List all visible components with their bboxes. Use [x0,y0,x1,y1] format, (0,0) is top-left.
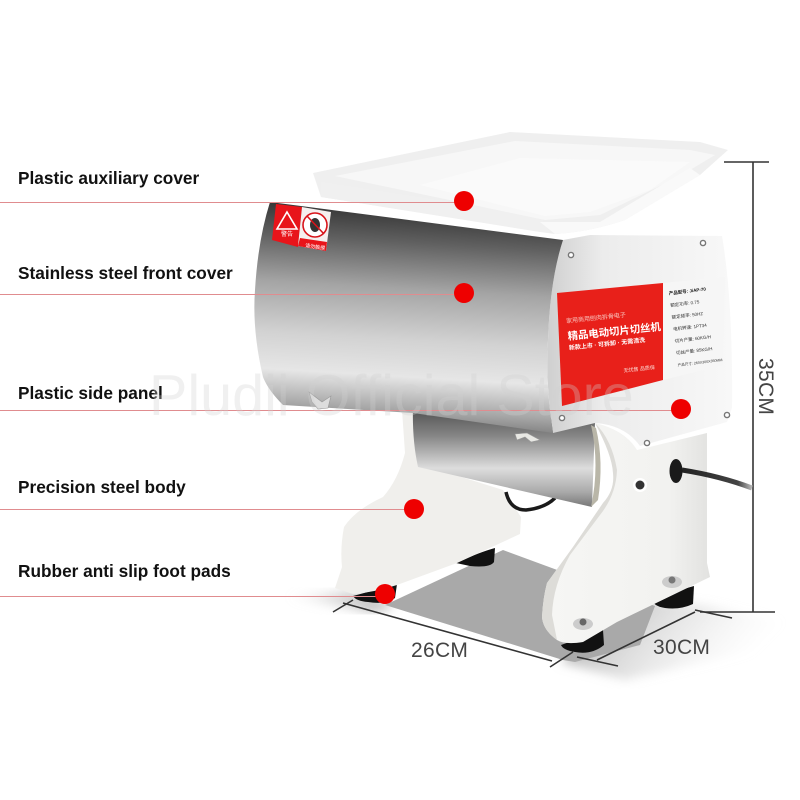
warning sticker: 请勿触摸 [305,242,326,252]
spec label text: 产品型号: JiAP-70 [668,285,707,297]
red product label [557,283,663,406]
label: rubber anti slip foot pads: Rubber anti slip foot pads [18,561,231,581]
floor shadow [285,550,785,680]
spec label text: 电机转速: 1PT34 [673,322,708,333]
callout dot: plastic auxiliary cover [454,191,474,211]
left leg [335,410,521,594]
label: plastic auxiliary cover: Plastic auxiliary cover [18,168,200,188]
foot front [561,630,604,653]
spec label text: 额定频率: 50HZ [671,310,704,321]
leg edge shading [542,423,617,640]
side panel [547,235,732,446]
callout dot: rubber foot pads [375,584,395,604]
callout leader lines [0,202,678,597]
side bolt [633,478,647,492]
right leg [542,423,710,643]
power cord [670,459,752,488]
watermark: Pludii Official Store [149,364,634,428]
rear foot [456,548,495,566]
wing nut [515,433,540,442]
panel screws [559,240,730,446]
motor end detail [591,425,601,507]
dimension lines [333,162,775,667]
foot front left [353,584,397,603]
label: precision steel body: Precision steel body [18,477,186,497]
wing nut [309,392,331,409]
red label text: 精品电动切片切丝机 [567,320,662,343]
plastic tray cover [313,132,728,234]
white spec label [663,277,725,380]
warning sticker [272,204,331,252]
spec label text: 产品尺寸: 260X300X350MM [677,357,723,367]
red label text: 新款上市 · 可拆卸 · 无需清洗 [569,336,646,352]
callout dot: precision steel body [404,499,424,519]
stainless steel front cover [254,202,563,433]
dimension: 26CM: 26CM [411,639,468,662]
callout dot: stainless steel front cover [454,283,474,303]
foot right rear [652,586,694,608]
red label text: 家用商用刨肉拆骨电子 [566,311,626,325]
spec label text: 切丝产量: 85KG/H [676,345,713,357]
spec label text: 切片产量: 60KG/H [674,333,711,345]
label: stainless steel front cover: Stainless steel front cover [18,263,233,283]
warning sticker: 警告 [281,230,293,238]
dimension: 35CM: 35CM [754,358,777,415]
steel motor cylinder [413,405,595,507]
red label text: 无忧售 品质保 [623,364,655,374]
spec label text: 额定功率: 0.75 [670,298,700,309]
spec label text [668,285,723,367]
label: plastic side panel: Plastic side panel [18,383,163,403]
inner cable [506,492,555,510]
callout dot: plastic side panel [671,399,691,419]
red label text [566,307,666,380]
foot bolts [573,576,682,630]
dimension: 30CM: 30CM [653,636,710,659]
